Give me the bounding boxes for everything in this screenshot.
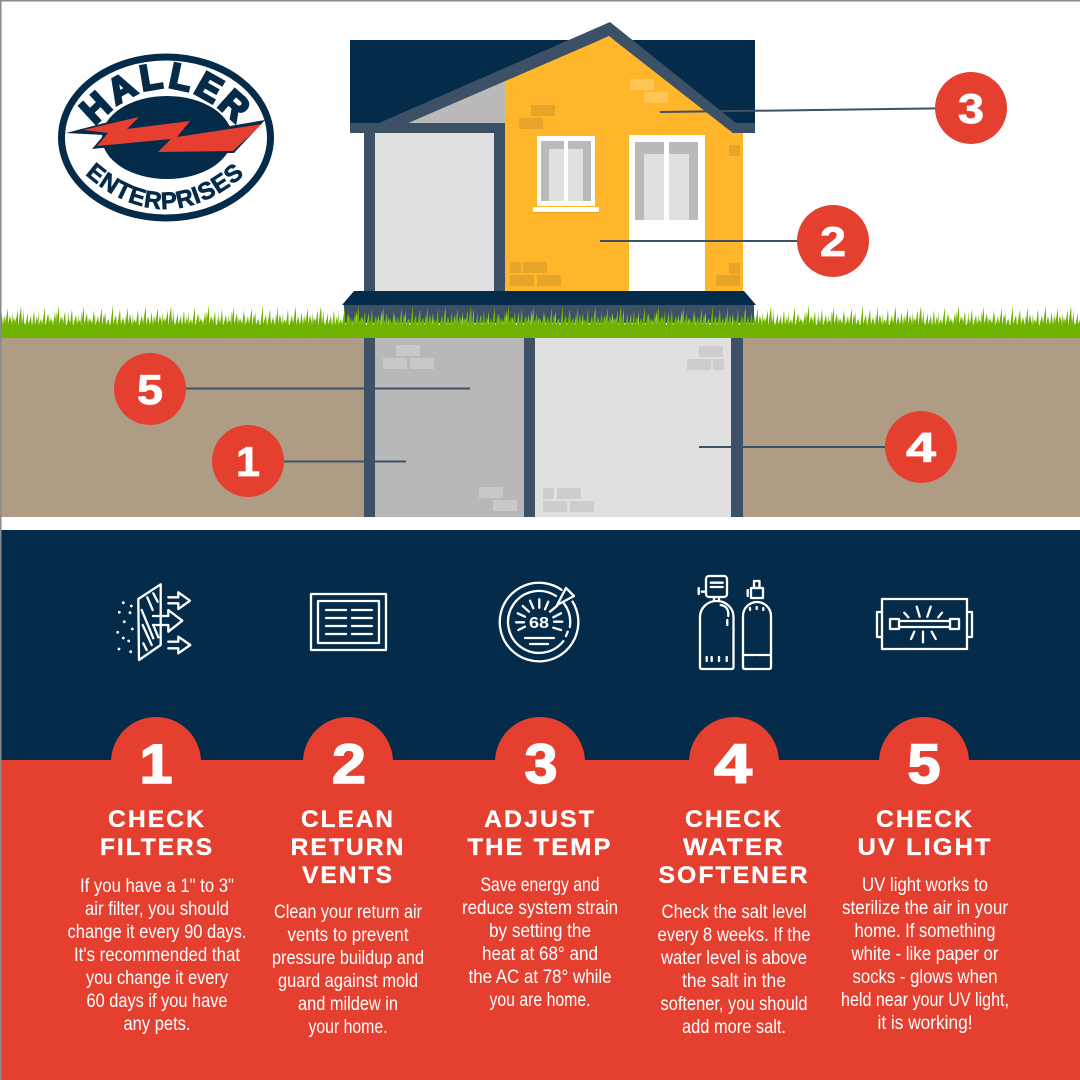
grass [0,300,1080,338]
heading: check water softener: WATER [683,834,785,861]
callout 5 [114,353,470,425]
icon: UV light [877,599,972,649]
left room wall [364,123,505,291]
text: vents body: your home. [308,1017,388,1038]
logo [58,54,274,222]
basement bricks [383,345,724,512]
heading: check UV light [858,806,992,861]
icon: thermostat: 68 [529,615,549,632]
text: filters body: any pets. [124,1014,190,1035]
heading: adjust the temp: THE TEMP [468,834,612,861]
text: UV body: it is working! [878,1013,972,1034]
callout 1 [212,425,406,497]
text: filters body: It's recommended that [74,945,241,966]
text: softener body: the salt in the [682,971,786,992]
step 5: 5 [908,732,940,795]
logo wordmark top: HALLER [78,62,250,126]
heading: check water softener: SOFTENER [658,862,810,889]
text: UV body [841,875,1009,1034]
roof [350,40,755,133]
heading: adjust the temp [468,806,612,861]
text: vents body: Clean your return air [274,902,423,923]
text: vents body: guard against mold [278,971,418,992]
text: temp body: Save energy and [480,875,600,896]
callout 2: 2 [820,218,846,265]
text: UV body: sterilize the air in your [842,898,1009,919]
text: temp body: heat at 68° and [482,944,598,965]
step 4: 4 [714,732,752,795]
basement [364,338,743,517]
heading: check UV light: UV LIGHT [858,834,992,861]
icon: air filter [116,584,190,660]
callout 5: 5 [137,366,163,413]
step 3: 3 [524,732,558,795]
heading: check filters: CHECK [108,806,206,833]
heading: check water softener [658,806,810,889]
text: UV body: socks - glows when [852,967,998,988]
heading: check filters: FILTERS [100,834,214,861]
red steps band [0,717,1080,1080]
step 3 [462,732,618,1011]
navy icon band [0,530,1080,760]
callout 2 [600,205,869,277]
yellow brick wall [505,36,743,291]
gable trim [379,22,755,133]
text: softener body: softener, you should [660,994,808,1015]
porch slab [342,291,756,323]
text: UV body: UV light works to [862,875,988,896]
icon: return vent [311,594,386,650]
text: filters body: air filter, you should [85,899,229,920]
step 1 [68,732,246,1035]
door [629,135,705,291]
heading: clean return vents: VENTS [302,862,394,889]
logo bolt [66,114,265,154]
callout 3: 3 [958,85,984,132]
ground [0,338,1080,517]
text: vents body [272,902,424,1038]
callout 4: 4 [906,424,937,471]
text: softener body: water level is above [660,948,807,969]
text: temp body: by setting the [489,921,591,942]
text: temp body: reduce system strain [462,898,618,919]
icon: thermostat [500,583,578,661]
text: softener body: every 8 weeks. If the [658,925,810,946]
text: temp body: the AC at 78° while [468,967,612,988]
house [342,22,756,323]
callout 3 [660,72,1007,144]
text: filters body: change it every 90 days. [68,922,246,943]
step 4 [658,732,810,1038]
grey gable triangle [408,81,505,123]
callout 1: 1 [236,438,260,485]
wall bricks [510,79,740,286]
text: vents body: pressure buildup and [272,948,424,969]
text: softener body [658,902,810,1038]
text: softener body: add more salt. [682,1017,786,1038]
step 2 [272,732,424,1038]
step 2: 2 [332,732,366,795]
callout 4 [699,411,957,483]
step 1: 1 [140,732,172,795]
text: vents body: and mildew in [298,994,398,1015]
heading: check UV light: CHECK [876,806,974,833]
text: filters body: 60 days if you have [86,991,228,1012]
logo wordmark bottom: ENTERPRISES [86,162,242,210]
text: filters body: you change it every [86,968,228,989]
text: UV body: white - like paper or [851,944,999,965]
text: temp body [462,875,618,1011]
text: vents body: vents to prevent [288,925,409,946]
icon: water softener tanks [699,576,771,669]
text: temp body: you are home. [490,990,590,1011]
text: softener body: Check the salt level [662,902,806,923]
text: filters body: If you have a 1" to 3" [80,876,234,897]
step 5 [841,732,1009,1034]
text: filters body [68,876,246,1035]
heading: clean return vents: CLEAN [301,806,395,833]
heading: check filters [100,806,214,861]
text: UV body: held near your UV light, [841,990,1009,1011]
window [533,136,599,213]
heading: adjust the temp: ADJUST [484,806,596,833]
heading: clean return vents [290,806,406,889]
heading: check water softener: CHECK [685,806,783,833]
text: UV body: home. If something [854,921,996,942]
heading: clean return vents: RETURN [290,834,406,861]
